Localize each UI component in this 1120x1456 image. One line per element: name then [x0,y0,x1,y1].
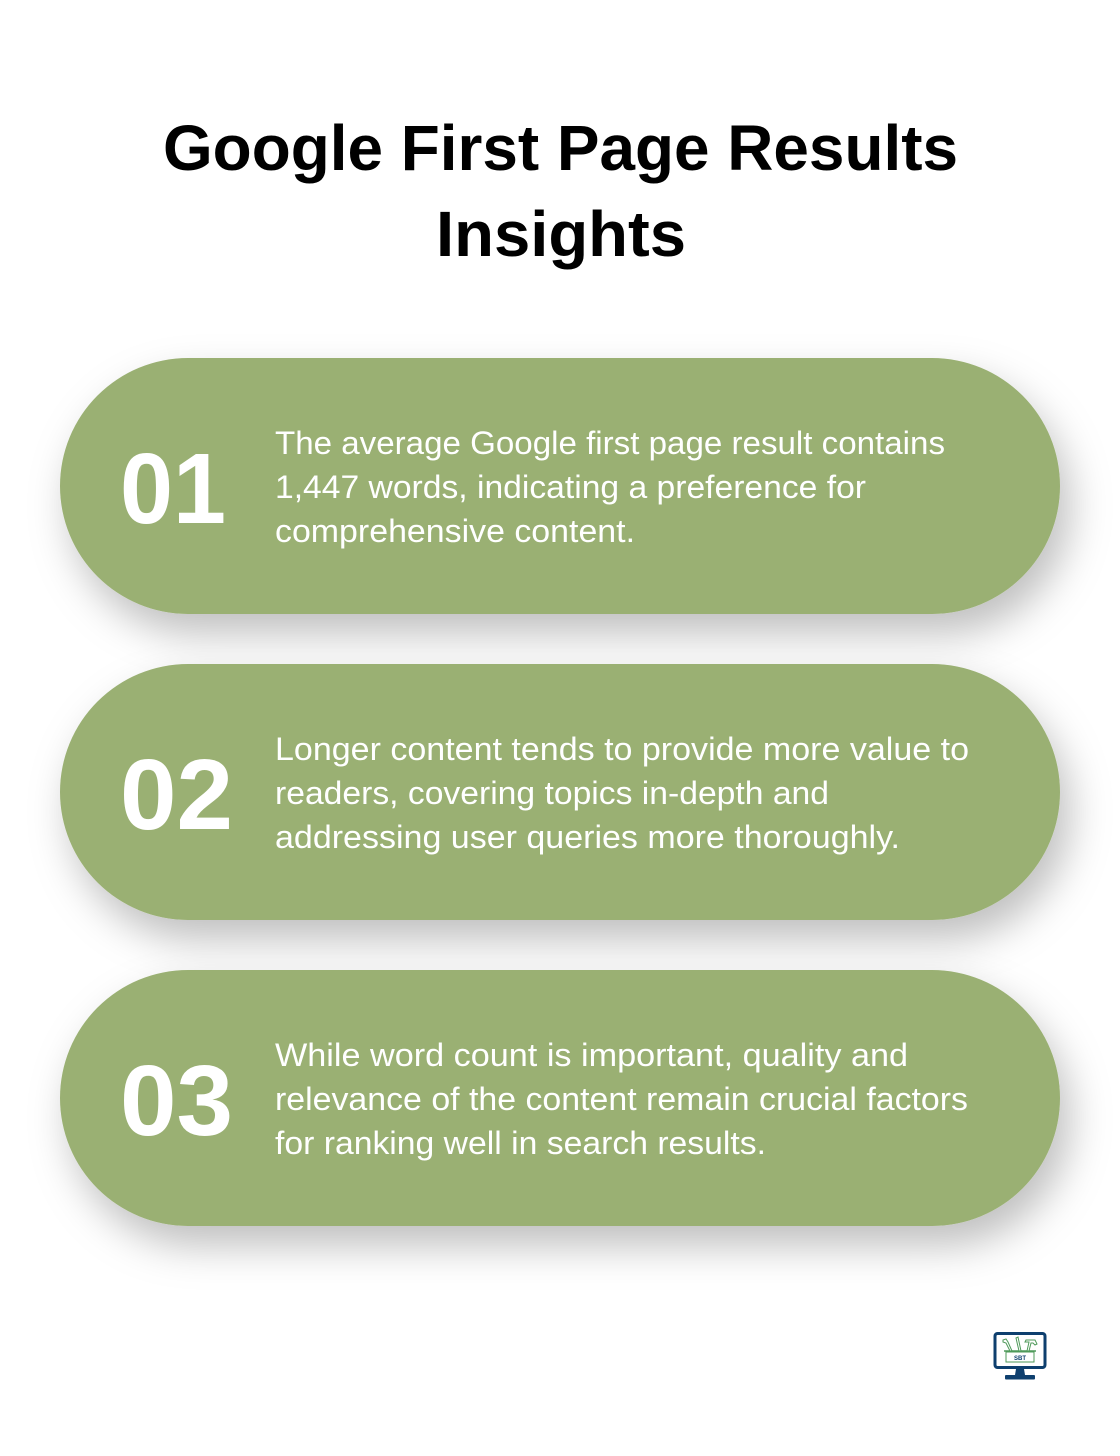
text block 02 [275,731,969,855]
icon: monitor with toolbox logo: SBT [1014,1356,1026,1362]
text block 03: for ranking well in search results. [275,1125,766,1161]
text block 02: readers, covering topics in-depth and [275,775,829,811]
text block 03: relevance of the content remain crucial factors [275,1081,968,1117]
text block 02: Longer content tends to provide more value to [275,731,969,767]
panel: insight 01 [60,358,1060,614]
title: Insights [436,198,686,270]
number 02: 02 [120,739,233,851]
text block 03: While word count is important, quality and [275,1037,908,1073]
text block 02: addressing user queries more thoroughly. [275,819,900,855]
panel: insight 03 [60,970,1060,1226]
title [163,112,958,270]
text block 03 [275,1037,968,1161]
icon: monitor with toolbox logo [995,1334,1045,1380]
text block 01: comprehensive content. [275,513,635,549]
panel: insight 02 [60,664,1060,920]
number 01: 01 [120,433,226,545]
text block 01 [275,425,945,549]
number 03: 03 [120,1045,233,1157]
text block 01: 1,447 words, indicating a preference for [275,469,866,505]
title: Google First Page Results [163,112,958,184]
text block 01: The average Google first page result contains [275,425,945,461]
